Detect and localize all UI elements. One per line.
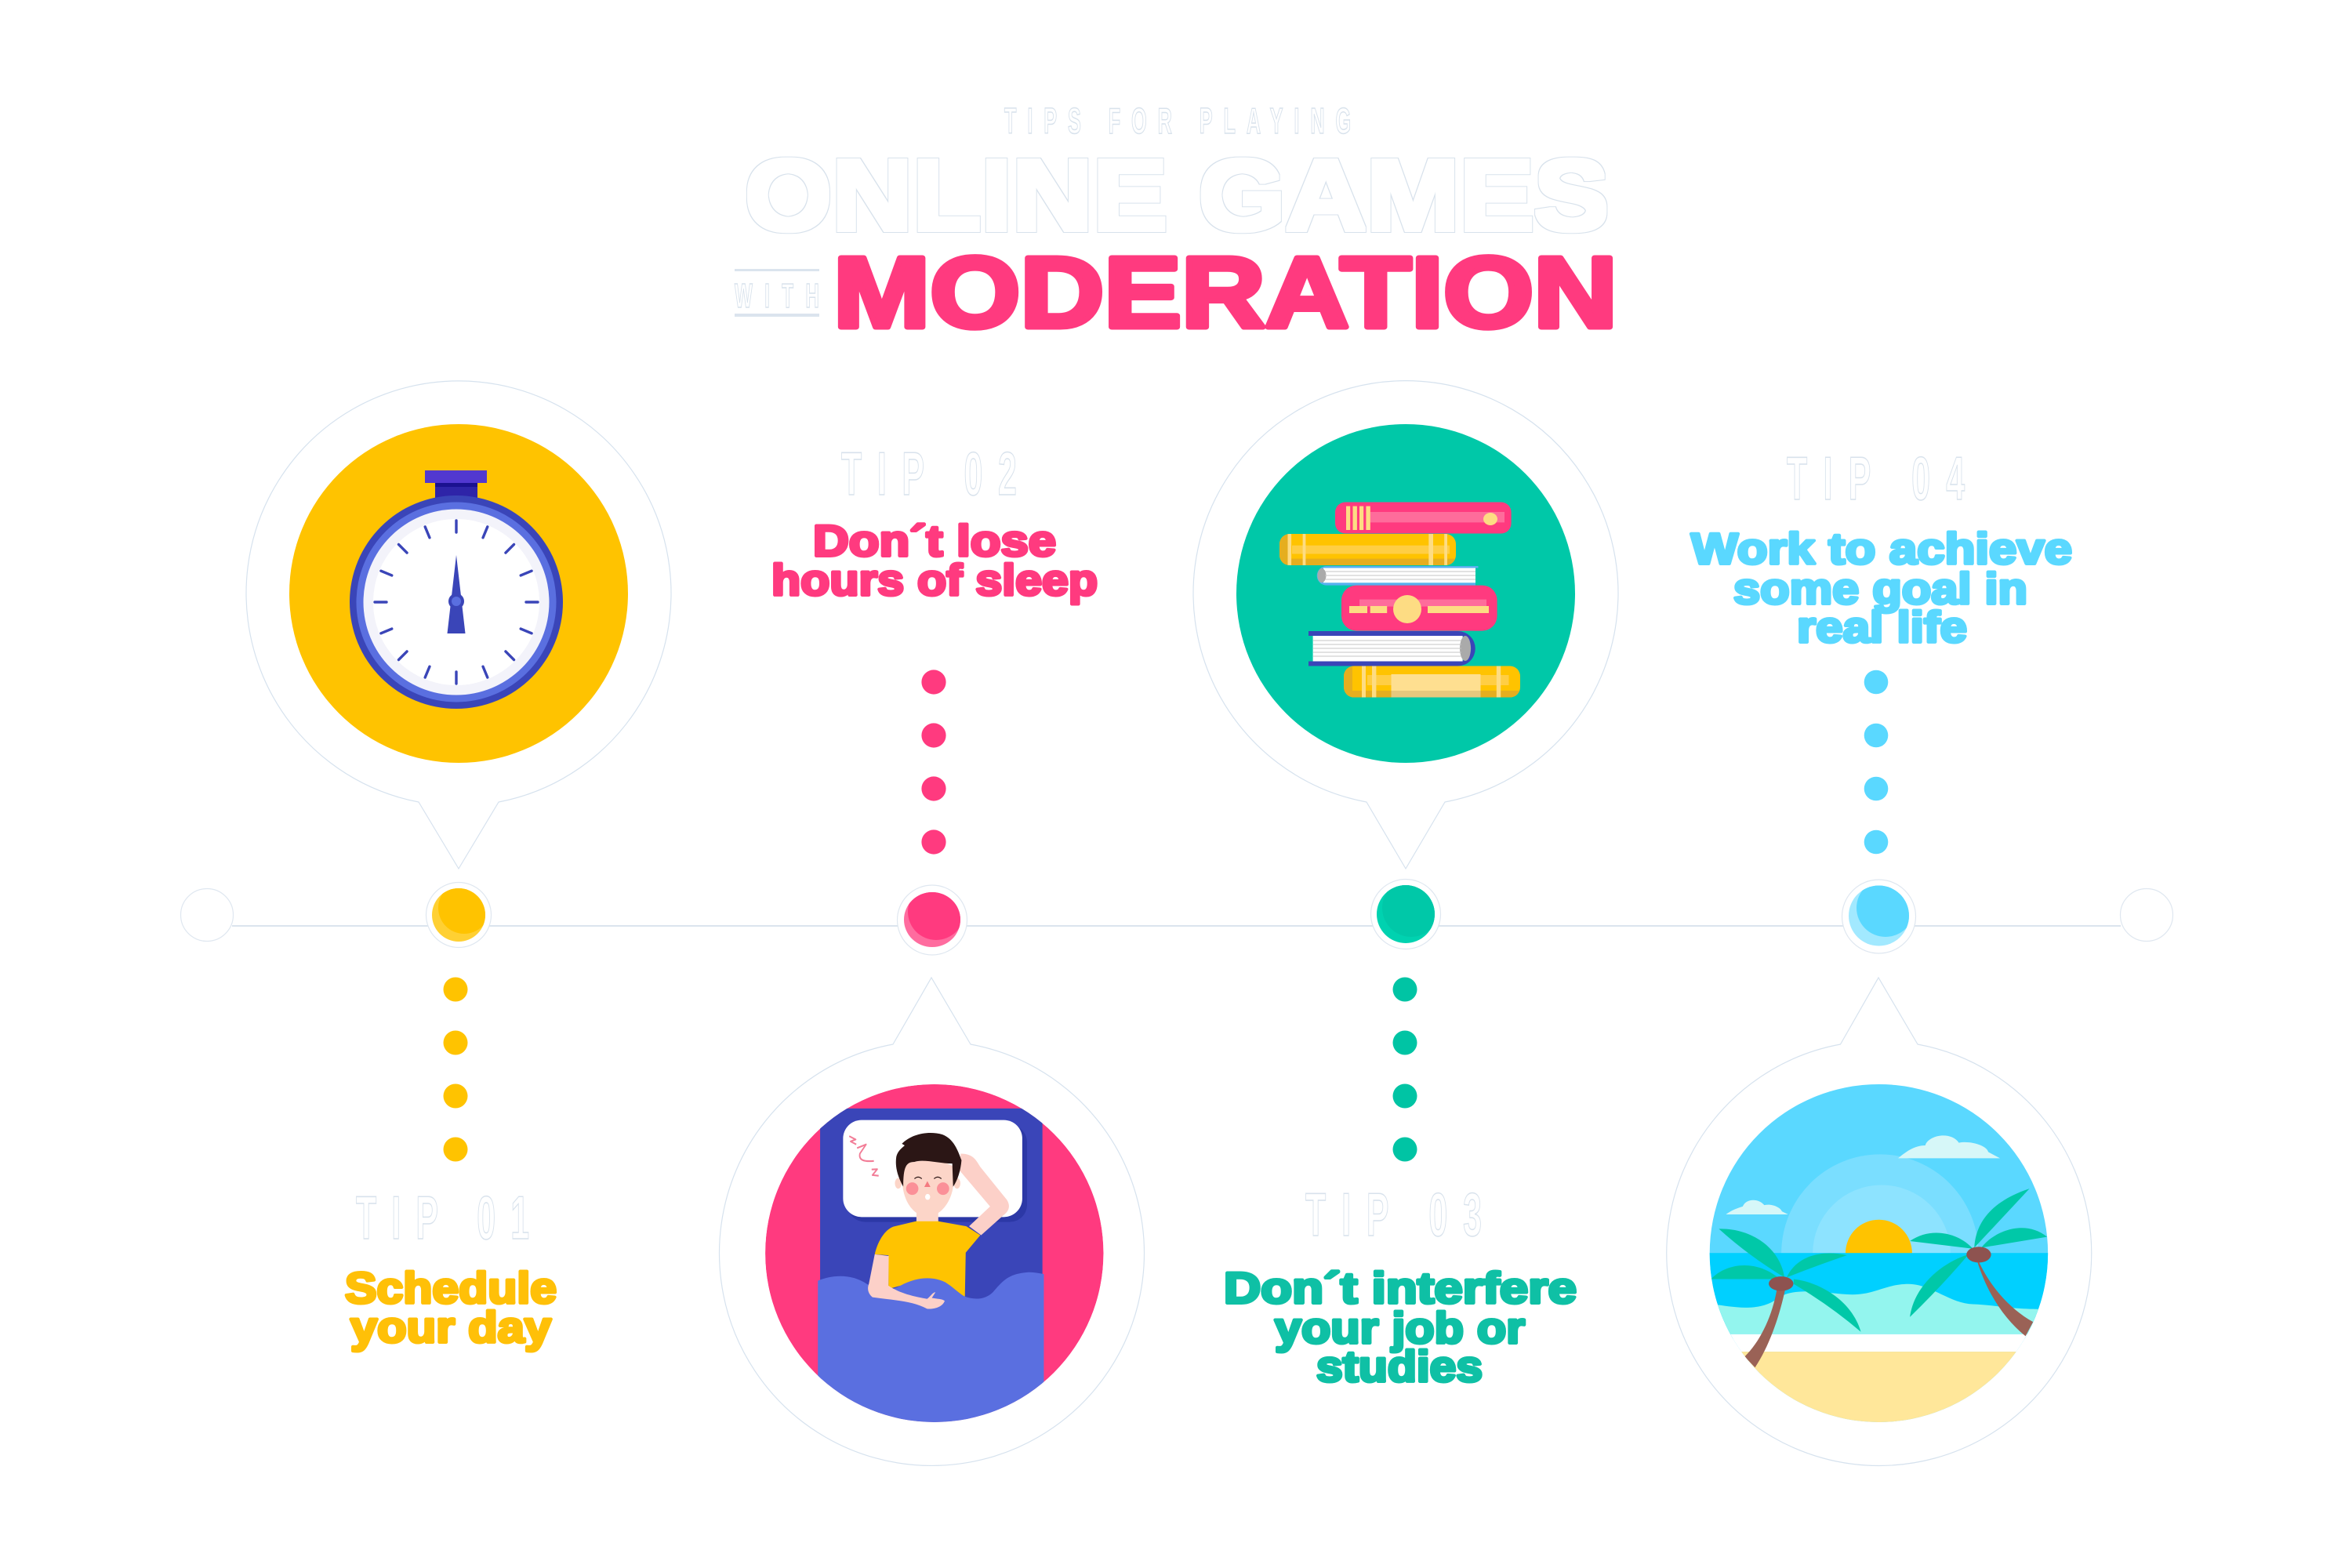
callout bubble	[1667, 978, 2092, 1465]
panel: tip 03	[1193, 381, 1618, 1391]
tip text: your job or	[1275, 1303, 1525, 1352]
tip text: Don´t interfere	[1224, 1263, 1577, 1312]
tip text	[345, 1263, 557, 1352]
tip label: TIP 04	[1787, 445, 1965, 513]
tip text: Schedule	[345, 1263, 557, 1312]
icon: stack of books	[1279, 502, 1520, 698]
icon: stopwatch	[350, 470, 563, 709]
tip text: real life	[1797, 602, 1967, 652]
timeline node	[897, 884, 967, 955]
tip text: hours of sleep	[771, 555, 1098, 604]
tip text: your day	[350, 1302, 551, 1352]
teal circle	[1236, 424, 1575, 763]
tip text: studies	[1316, 1341, 1483, 1391]
dotted connector	[1392, 977, 1417, 1162]
title tag: with: WITH	[735, 276, 819, 315]
panel: tip 01	[246, 381, 671, 1352]
panel: tip 04	[1667, 445, 2092, 1465]
tip text	[771, 516, 1098, 604]
callout bubble	[246, 381, 671, 869]
tip label: TIP 01	[356, 1185, 529, 1252]
book 3	[1317, 566, 1479, 586]
timeline node	[426, 882, 491, 947]
dotted connector	[444, 977, 467, 1162]
tip text: Work to achieve	[1691, 524, 2072, 573]
yellow circle	[289, 424, 628, 763]
tip text: some goal in	[1733, 564, 2027, 613]
timeline node	[1842, 879, 1916, 953]
book 4	[1341, 586, 1497, 631]
title line: online games: ONLINE GAMES	[745, 140, 1609, 252]
tip text: Don´t lose	[813, 516, 1056, 565]
title	[735, 100, 1617, 349]
tip label: TIP 03	[1305, 1181, 1482, 1249]
book 2	[1279, 534, 1456, 565]
callout bubble	[720, 978, 1144, 1465]
icon: person sleeping in bed	[765, 1084, 1103, 1434]
book 1	[1335, 502, 1512, 533]
dotted connector	[1864, 670, 1888, 854]
title line: tips for playing: TIPS FOR PLAYING	[1004, 100, 1351, 141]
timeline node	[1370, 879, 1441, 949]
tip label: TIP 02	[841, 441, 1017, 508]
title line: moderation: MODERATION	[833, 237, 1617, 349]
callout bubble	[1193, 381, 1618, 869]
infographic	[180, 107, 2173, 1466]
book 6	[1344, 666, 1520, 698]
timeline	[180, 889, 2173, 941]
book 5	[1308, 631, 1475, 666]
dotted connector	[921, 670, 946, 855]
tip text	[1691, 524, 2072, 652]
tip text	[1224, 1263, 1577, 1391]
icon: beach with palm trees	[1709, 1084, 2048, 1422]
panel: tip 02	[720, 441, 1144, 1465]
